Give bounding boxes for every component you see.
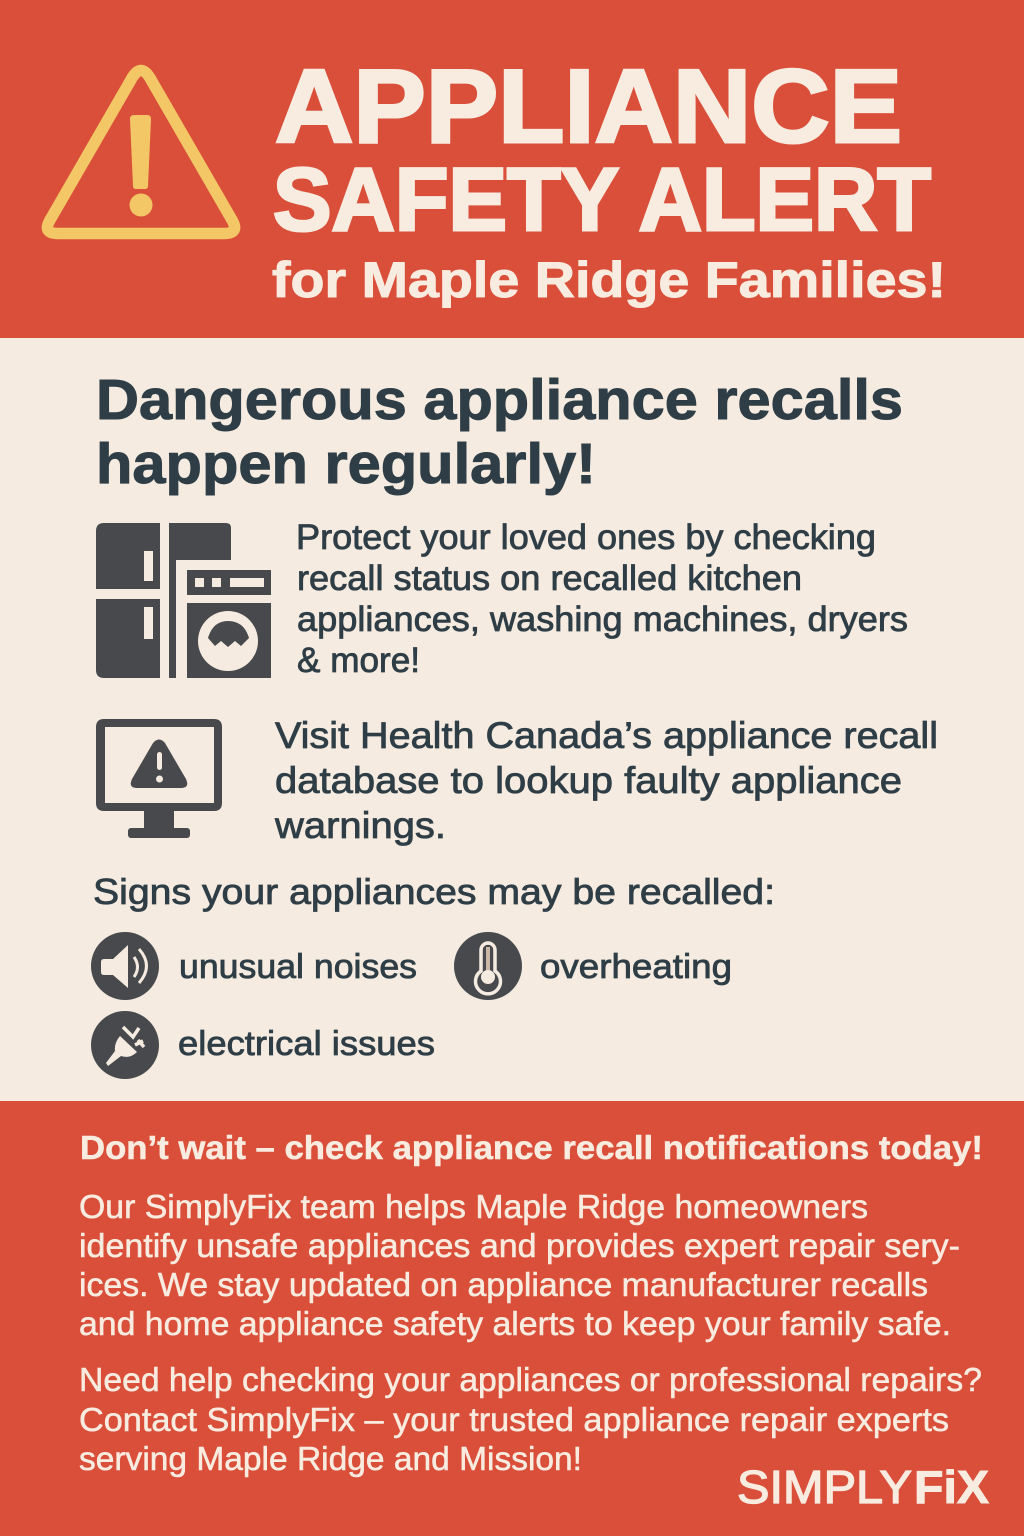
text: about SimplyFix [79, 1189, 960, 1343]
text: protect loved ones: appliances, washing machines, dryers [297, 600, 908, 639]
sign: overheating: overheating [540, 948, 732, 986]
heading [96, 368, 903, 496]
text: protect loved ones: recall status on recalled kitchen [297, 559, 802, 598]
panel: footer [0, 1101, 1024, 1536]
text: about SimplyFix: identify unsafe appliances and provides expert repair sery- [79, 1228, 960, 1265]
text: protect loved ones: & more! [297, 641, 420, 680]
sign: unusual noises: unusual noises [179, 948, 417, 986]
title [272, 49, 946, 308]
logo: SimplyFix: SIMPLY [737, 1461, 912, 1513]
subheading: signs: Signs your appliances may be recalled: [93, 871, 775, 912]
text: visit Health Canada: warnings. [274, 805, 446, 846]
icon: monitor with warning [96, 719, 222, 838]
panel: main content [0, 338, 1024, 1101]
text: visit Health Canada: Visit Health Canada’s appliance recall [275, 715, 938, 756]
text: contact [79, 1362, 982, 1478]
text: visit Health Canada: database to lookup faulty appliance [275, 760, 902, 801]
sign: unusual noises [91, 932, 417, 1000]
logo: SimplyFix: FiX [914, 1461, 989, 1513]
text: contact: Contact SimplyFix – your trusted appliance repair experts [79, 1402, 949, 1439]
text: about SimplyFix: Our SimplyFix team helps Maple Ridge homeowners [79, 1189, 868, 1226]
text: about SimplyFix: and home appliance safety alerts to keep your family safe. [79, 1306, 951, 1343]
text: about SimplyFix: ices. We stay updated on appliance manufacturer recalls [79, 1267, 928, 1304]
text: contact: Need help checking your appliances or professional repairs? [79, 1362, 982, 1399]
text: contact: serving Maple Ridge and Mission! [79, 1441, 582, 1478]
panel: header banner [0, 0, 1024, 338]
sign: electrical issues [91, 1011, 435, 1079]
text: protect loved ones [296, 518, 908, 680]
call to action: Don’t wait – check appliance recall notifications today! [80, 1129, 983, 1166]
heading: Dangerous appliance recalls [96, 368, 903, 432]
text: visit Health Canada [274, 715, 938, 846]
icon: warning triangle [47, 70, 235, 234]
heading: happen regularly! [96, 432, 596, 496]
title: for Maple Ridge Families! [272, 252, 946, 308]
logo: SimplyFix [737, 1461, 989, 1513]
title: APPLIANCE [275, 49, 902, 165]
icon: kitchen appliances [96, 523, 271, 678]
text: protect loved ones: Protect your loved ones by checking [296, 518, 876, 557]
sign: overheating [454, 932, 732, 1000]
title: SAFETY ALERT [273, 149, 931, 249]
sign: electrical issues: electrical issues [178, 1025, 435, 1063]
